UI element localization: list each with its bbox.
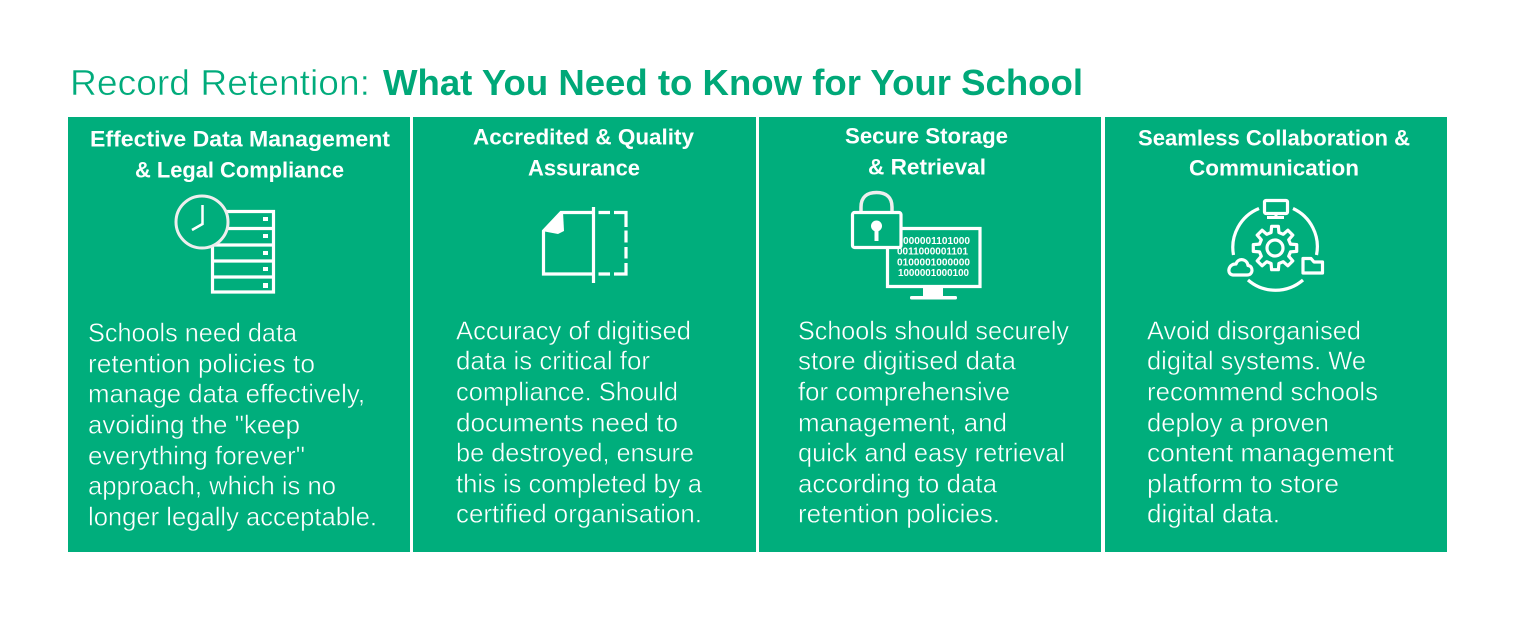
body text: secure digitised data: store digitised data: [798, 346, 1017, 376]
body text: data retention policies: Schools need data: [88, 318, 298, 348]
heading: effective data management: [90, 126, 391, 182]
heading: accredited and quality assurance: Accredited & Quality: [473, 124, 695, 150]
heading: secure storage and retrieval: Secure Storage: [845, 124, 1008, 148]
heading: effective data management: Effective Data Management: [90, 126, 391, 152]
body text: secure digitised data: management, and: [798, 408, 1007, 438]
title: [70, 62, 1083, 103]
body text: data retention policies: avoiding the "keep: [88, 410, 300, 440]
body text: secure digitised data: quick and easy retrieval: [798, 438, 1065, 468]
heading: accredited and quality assurance: [473, 124, 695, 180]
body text: data retention policies: [88, 318, 377, 532]
body text: secure digitised data: retention policies.: [798, 498, 1000, 528]
body text: disorganised digital systems: [1147, 316, 1395, 528]
body text: data retention policies: everything forever": [88, 440, 305, 470]
body text: secure digitised data: for comprehensive: [798, 376, 1010, 406]
icon: padlock and binary monitor: 000001101000: [903, 236, 970, 247]
icon: document with dashed mirror: [542, 207, 626, 283]
heading: secure storage and retrieval: & Retrieval: [868, 154, 986, 180]
panel: seamless collaboration and communication: [1105, 117, 1447, 552]
icon: padlock and binary monitor: 0100001000000: [897, 258, 970, 268]
panel: effective data management and legal compliance: [68, 117, 410, 552]
body text: data retention policies: manage data effectively,: [88, 378, 365, 408]
body text: accuracy of digitised data: compliance. Should: [456, 376, 678, 406]
body text: accuracy of digitised data: [456, 316, 703, 528]
body text: accuracy of digitised data: Accuracy of digitised: [456, 316, 691, 346]
body text: secure digitised data: Schools should securely: [798, 316, 1069, 346]
heading: seamless collaboration: [1138, 126, 1410, 180]
body text: accuracy of digitised data: data is critical for: [456, 346, 650, 376]
body text: disorganised digital systems: content management: [1147, 438, 1395, 468]
body text: accuracy of digitised data: documents need to: [456, 408, 678, 438]
heading: accredited and quality assurance: Assurance: [528, 156, 640, 180]
heading: seamless collaboration: Seamless Collaboration &: [1138, 126, 1410, 150]
heading: seamless collaboration: Communication: [1189, 156, 1359, 180]
body text: secure digitised data: according to data: [798, 468, 998, 498]
icon: padlock and binary monitor: 1000001000100: [898, 268, 969, 279]
body text: accuracy of digitised data: certified organisation.: [456, 498, 702, 528]
icon: padlock and binary monitor: [852, 192, 980, 300]
body text: disorganised digital systems: digital systems. We: [1147, 346, 1366, 376]
icon: gear with monitor, cloud and folder: [1229, 200, 1322, 290]
body text: disorganised digital systems: Avoid disorganised: [1147, 316, 1361, 346]
body text: disorganised digital systems: recommend schools: [1147, 376, 1378, 406]
body text: disorganised digital systems: deploy a proven: [1147, 408, 1329, 438]
body text: disorganised digital systems: platform to store: [1147, 468, 1339, 498]
icon: padlock and binary monitor: 0011000001101: [897, 246, 968, 258]
icon: clock and server stack: [176, 196, 274, 292]
heading: effective data management: & Legal Compliance: [135, 158, 344, 182]
body text: data retention policies: longer legally acceptable.: [88, 502, 377, 532]
body text: secure digitised data: [798, 316, 1069, 528]
body text: data retention policies: approach, which is no: [88, 470, 336, 500]
panel: secure storage and retrieval: [759, 117, 1101, 552]
panel: accredited and quality assurance: [413, 117, 756, 552]
heading: secure storage and retrieval: [845, 124, 1008, 180]
body text: accuracy of digitised data: this is completed by a: [456, 468, 703, 498]
body text: disorganised digital systems: digital data.: [1147, 498, 1280, 528]
title: What You Need to Know for Your School: [383, 62, 1083, 103]
title: Record Retention:: [70, 62, 370, 103]
body text: accuracy of digitised data: be destroyed, ensure: [456, 438, 694, 468]
body text: data retention policies: retention policies to: [88, 348, 315, 378]
